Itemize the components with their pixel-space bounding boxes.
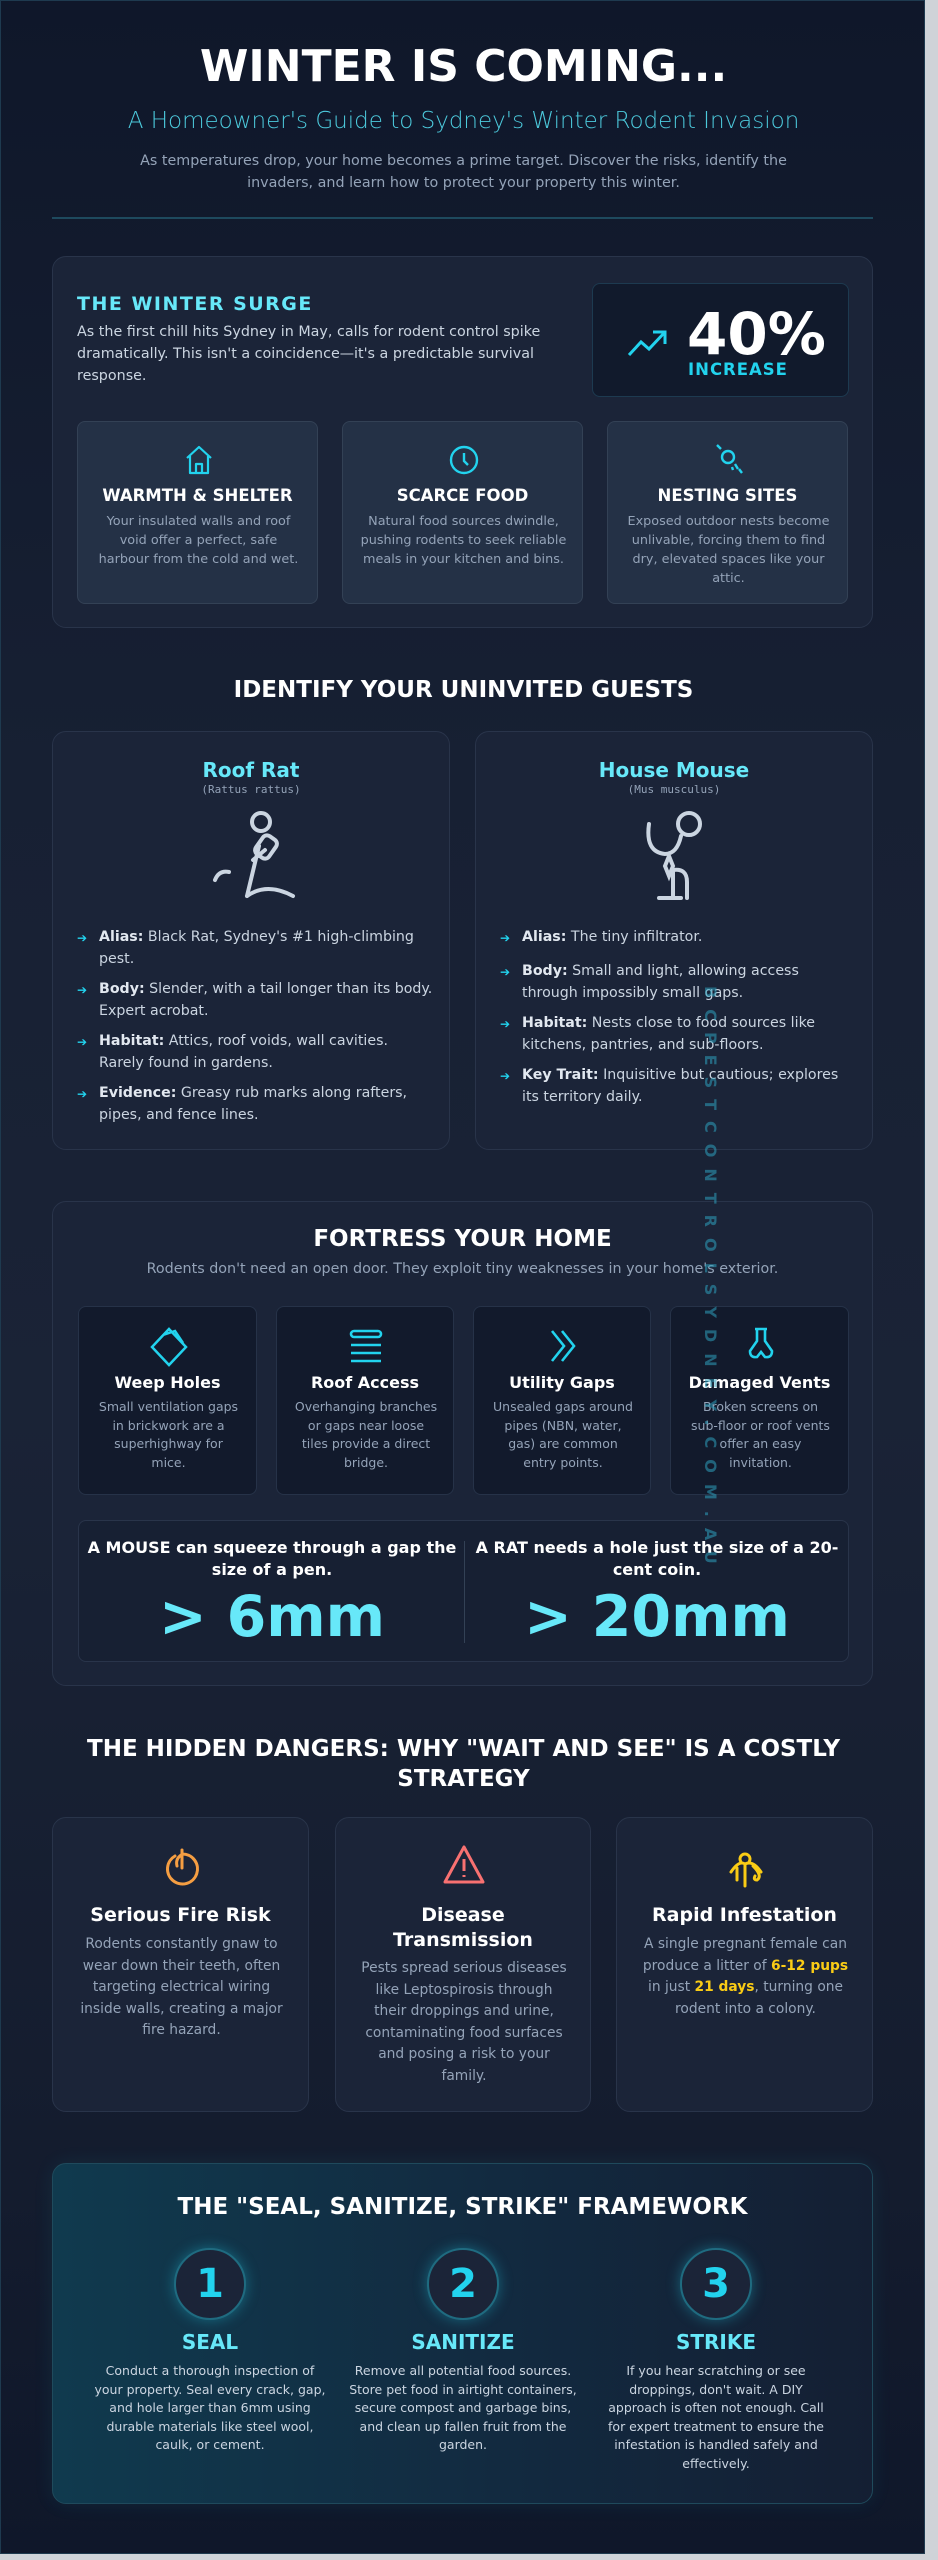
panel: roof rat: (Rattus rattus) — [201, 783, 301, 796]
list: rat facts: pest. — [99, 951, 134, 967]
card: fire risk: Rodents constantly gnaw to wear down their teeth, often targeting electrical wiring inside walls, creating a major fire hazard. — [80, 1936, 283, 2038]
card: infestation — [616, 1817, 873, 2112]
card: nesting sites — [607, 421, 848, 604]
card: roof access: bridge. — [344, 1454, 388, 1470]
card: damaged vents: Damaged Vents — [689, 1373, 830, 1392]
step: strike: 3 — [702, 2261, 730, 2307]
card: damaged vents: offer an easy — [720, 1436, 801, 1451]
list: mouse facts: kitchens, pantries, and sub-floors. — [522, 1037, 764, 1053]
card: nesting sites: Exposed outdoor nests become unlivable, forcing them to find dry, elevated spaces like your attic. — [627, 514, 830, 586]
card: utility gaps: Utility Gaps — [509, 1373, 615, 1392]
list: mouse facts: through impossibly small gaps. — [522, 985, 743, 1001]
panel: roof rat — [52, 731, 450, 1150]
panel: house mouse: (Mus musculus) — [628, 783, 720, 796]
card: damaged vents — [670, 1306, 849, 1495]
step: seal: 1 — [196, 2261, 224, 2307]
card: utility gaps: pipes (NBN, water, — [504, 1418, 622, 1432]
card: damaged vents: sub-floor or roof vents — [691, 1418, 830, 1432]
stat: mouse 6mm: A MOUSE can squeeze through a gap the size of a pen. — [88, 1538, 456, 1579]
card: roof access: Overhanging branches — [295, 1399, 437, 1414]
step: strike: If you hear scratching or see droppings, don't wait. A DIY approach is often not enough. Call for expert treatment to ensure the infestation is handled safely and effectively. — [608, 2363, 824, 2470]
card: warmth & shelter — [77, 421, 318, 604]
card: weep holes: superhighway for — [114, 1436, 223, 1451]
list: mouse facts — [500, 929, 838, 1105]
list: rat facts — [78, 929, 432, 1123]
callout: gap sizes — [78, 1520, 849, 1662]
watermark: vertical site name: BCPESTCONTROLSYDNEY.COM.AU — [701, 986, 720, 1575]
text: surge description: As the first chill hits Sydney in May, calls for rodent control spike dramatically. This isn't a coincidence—it's a predictable survival response. — [77, 324, 540, 384]
subtitle: A Homeowner's Guide to Sydney's Winter Rodent Invasion — [128, 108, 799, 134]
stat: rat 20mm: > 20mm — [524, 1584, 790, 1650]
stat: 40% increase — [592, 283, 849, 397]
card: utility gaps: entry points. — [523, 1454, 603, 1470]
card: weep holes: Small ventilation gaps — [99, 1399, 238, 1414]
card: scarce food: SCARCE FOOD — [397, 486, 528, 505]
icon: nest — [716, 444, 743, 474]
stat: rat 20mm: A RAT needs a hole just the size of a 20-cent coin. — [476, 1538, 838, 1579]
card: scarce food — [342, 421, 583, 604]
step: sanitize: SANITIZE — [411, 2330, 515, 2354]
stat: 40% increase: INCREASE — [688, 360, 788, 379]
card: warmth & shelter: harbour from the cold and wet. — [99, 552, 298, 567]
list: rat facts: pipes, and fence lines. — [99, 1107, 259, 1123]
icon: clock — [450, 446, 478, 474]
card: damaged vents: invitation. — [729, 1454, 792, 1470]
card: weep holes: in brickwork are a — [112, 1418, 225, 1432]
card: utility gaps — [473, 1306, 651, 1495]
card: roof access: or gaps near loose — [308, 1418, 424, 1432]
list: mouse facts: Body: Small and light, allowing access — [522, 963, 799, 979]
icon: fire — [166, 1848, 199, 1886]
card: damaged vents: Broken screens on — [703, 1399, 818, 1414]
list: mouse facts: Alias: The tiny infiltrator. — [522, 929, 702, 945]
card: warmth & shelter: WARMTH & SHELTER — [102, 486, 293, 505]
card: disease: Disease — [421, 1904, 505, 1926]
icon: rat — [212, 811, 296, 898]
card: infestation: A single pregnant female can produce a litter of 6-12 pups in just 21 days, turning one rodent into a colony. — [643, 1936, 848, 2016]
panel: house mouse — [475, 731, 873, 1150]
list: rat facts: Body: Slender, with a tail longer than its body. — [99, 981, 432, 997]
list: rat facts: Evidence: Greasy rub marks along rafters, — [99, 1085, 407, 1101]
card: fire risk — [52, 1817, 309, 2112]
icon: diamond — [150, 1327, 188, 1367]
step: sanitize: 2 — [449, 2261, 477, 2307]
card: roof access — [276, 1306, 454, 1495]
panel: fortress your home: Rodents don't need an open door. They exploit tiny weaknesses in your home's exterior. — [147, 1261, 778, 1277]
icon: stacked lines — [350, 1330, 382, 1362]
icon: warning — [444, 1845, 484, 1884]
step: seal: Conduct a thorough inspection of your property. Seal every crack, gap, and hole larger than 6mm using durable materials like steel wool, caulk, or cement. — [94, 2363, 326, 2452]
card: infestation: Rapid Infestation — [652, 1904, 837, 1926]
card: disease: Pests spread serious diseases like Leptospirosis through their droppings and urine, contaminating food surfaces and posing a risk to your family. — [361, 1960, 567, 2084]
icon: mouse — [646, 811, 702, 900]
panel: seal sanitize strike framework — [52, 2163, 873, 2504]
panel: winter surge — [52, 256, 873, 628]
step: sanitize — [349, 2242, 577, 2452]
panel: fortress your home — [52, 1201, 873, 1686]
list: mouse facts: Habitat: Nests close to food sources like — [522, 1015, 815, 1031]
list: mouse facts: Key Trait: Inquisitive but cautious; explores — [522, 1067, 838, 1083]
card: disease: Transmission — [393, 1929, 533, 1951]
step: seal: SEAL — [182, 2330, 238, 2354]
card: utility gaps: Unsealed gaps around — [493, 1399, 633, 1414]
heading: identify your uninvited guests: IDENTIFY YOUR UNINVITED GUESTS — [234, 677, 693, 703]
step: strike — [608, 2242, 824, 2470]
title: WINTER IS COMING... — [200, 41, 727, 92]
heading: hidden dangers: THE HIDDEN DANGERS: WHY "WAIT AND SEE" IS A COSTLY STRATEGY — [87, 1736, 840, 1792]
heading: framework: THE "SEAL, SANITIZE, STRIKE" FRAMEWORK — [178, 2194, 748, 2220]
card: weep holes — [78, 1306, 257, 1495]
list: rat facts: Alias: Black Rat, Sydney's #1 high-climbing — [99, 929, 414, 945]
icon: chevrons — [551, 1330, 576, 1362]
heading: fortress: FORTRESS YOUR HOME — [313, 1226, 612, 1252]
list: rat facts: Expert acrobat. — [99, 1003, 208, 1019]
stat: rat 20mm — [476, 1538, 838, 1650]
card: roof access: tiles provide a direct — [302, 1436, 430, 1451]
list: rat facts: Rarely found in gardens. — [99, 1055, 273, 1071]
stat: 40% increase: 40% — [687, 300, 826, 368]
card: roof access: Roof Access — [311, 1373, 419, 1392]
card: warmth & shelter: void offer a perfect, safe — [120, 533, 277, 548]
panel: house mouse: House Mouse — [599, 758, 749, 782]
card: utility gaps: gas) are common — [508, 1436, 618, 1451]
icon: trending up — [628, 330, 666, 356]
card: weep holes: Weep Holes — [114, 1373, 221, 1392]
card: fire risk: Serious Fire Risk — [90, 1904, 271, 1926]
card: weep holes: mice. — [151, 1454, 186, 1470]
icon: house — [186, 446, 212, 474]
step: sanitize: Remove all potential food sources. Store pet food in airtight containers, secure compost and garbage bins, and clean up fallen fruit from the garden. — [349, 2363, 577, 2452]
panel: roof rat: Roof Rat — [202, 758, 300, 782]
icon: rodents — [729, 1852, 763, 1888]
card: warmth & shelter: Your insulated walls and roof — [107, 514, 290, 529]
card: scarce food: Natural food sources dwindle, pushing rodents to seek reliable meals in your kitchen and bins. — [361, 514, 566, 567]
stat: mouse 6mm: > 6mm — [159, 1584, 385, 1650]
stat: mouse 6mm — [88, 1538, 456, 1650]
list: mouse facts: its territory daily. — [522, 1089, 643, 1105]
list: rat facts: Habitat: Attics, roof voids, wall cavities. — [99, 1033, 388, 1049]
card: disease — [335, 1817, 591, 2112]
step: seal — [94, 2242, 326, 2452]
card: nesting sites: NESTING SITES — [658, 486, 797, 505]
heading: the winter surge: THE WINTER SURGE — [77, 293, 313, 315]
step: strike: STRIKE — [676, 2330, 756, 2354]
intro text: As temperatures drop, your home becomes a prime target. Discover the risks, identify the invaders, and learn how to protect your property this winter. — [140, 153, 787, 191]
icon: vent — [748, 1328, 774, 1358]
